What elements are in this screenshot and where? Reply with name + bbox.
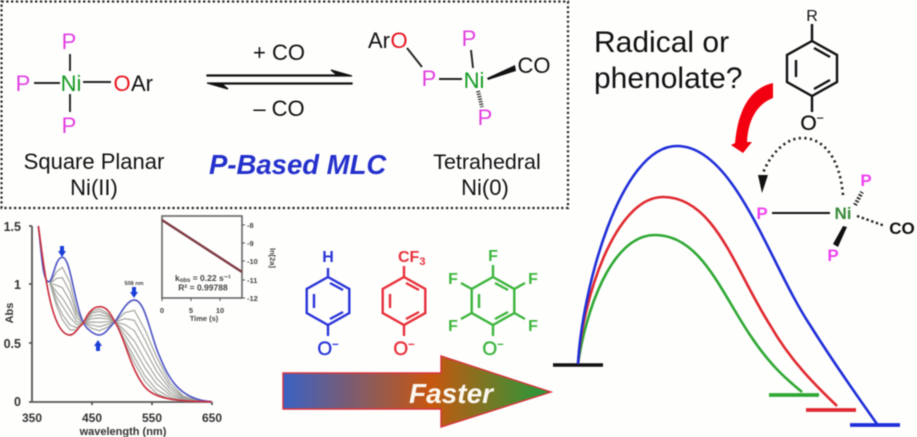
tetrahedral complex: Ni <box>464 68 484 93</box>
green phenolate: F <box>448 271 458 288</box>
label: P-Based MLC: P-Based MLC <box>209 149 387 180</box>
equilibrium arrows: + CO <box>253 40 305 65</box>
equilibrium arrows <box>207 40 352 121</box>
generic phenolate: − <box>817 111 824 125</box>
y tick labels: 1.5 <box>4 220 21 234</box>
blue phenolate: H <box>322 249 334 266</box>
generic phenolate: R <box>806 8 818 25</box>
heading: radical or phenolate <box>594 26 742 95</box>
y axis title: Abs <box>4 303 16 323</box>
chart: absorbance spectra <box>4 220 222 437</box>
label: tetrahedral: Tetrahedral <box>433 150 541 174</box>
blue phenolate <box>307 249 349 360</box>
inset chart: kinetics: 5 <box>189 306 193 315</box>
inset chart: kinetics <box>160 216 277 323</box>
nickel intermediate with dotted attack arrow: P <box>827 246 839 265</box>
label: Ni(0): Ni(0) <box>461 175 509 200</box>
square planar complex: Ar <box>131 71 153 96</box>
inset chart: kinetics: 0 <box>160 306 164 315</box>
heading: radical or phenolate: Radical or <box>594 26 729 59</box>
y tick labels: 1 <box>14 278 21 292</box>
inset chart: kinetics: -11 <box>247 276 257 285</box>
green phenolate: F <box>528 318 538 335</box>
red phenolate: CF <box>398 249 419 266</box>
nickel intermediate with dotted attack arrow: P <box>860 171 872 190</box>
tetrahedral complex <box>368 26 550 130</box>
inset chart: kinetics: Time (s) <box>190 314 219 323</box>
spectra curves <box>38 226 212 402</box>
x tick labels: 350 <box>22 411 42 425</box>
green phenolate <box>448 248 538 360</box>
tetrahedral complex: P <box>478 105 492 130</box>
axes <box>29 226 212 405</box>
blue phenolate: − <box>332 339 339 351</box>
blue change arrows <box>58 246 138 351</box>
inset chart: kinetics: = 0.22 s⁻¹ <box>190 273 231 283</box>
generic phenolate: O <box>800 112 817 135</box>
square planar complex: O <box>113 71 131 96</box>
inset chart: kinetics: -9 <box>247 239 254 248</box>
inset chart: kinetics: -12 <box>247 294 258 303</box>
peak label: 508 nm <box>125 281 144 287</box>
equilibrium arrows: – CO <box>253 96 305 121</box>
x tick labels: 650 <box>202 411 222 425</box>
red phenolate: 3 <box>419 256 425 268</box>
inset chart: kinetics: -8 <box>247 221 254 230</box>
inset chart: kinetics: -10 <box>247 257 258 266</box>
nickel intermediate with dotted attack arrow: Ni <box>834 204 852 223</box>
generic phenolate <box>787 8 837 135</box>
label: Ni(II): Ni(II) <box>70 175 118 200</box>
green phenolate: F <box>448 318 458 335</box>
square planar complex <box>16 29 153 138</box>
x tick labels: 550 <box>142 411 162 425</box>
green phenolate: F <box>488 248 498 265</box>
red curved arrow <box>731 83 773 153</box>
blue phenolate: O <box>317 339 332 360</box>
red phenolate: O <box>393 339 408 360</box>
inset chart: kinetics: R² = 0.99788 <box>178 282 228 292</box>
nickel intermediate with dotted attack arrow: P <box>756 204 768 223</box>
y tick labels <box>4 220 21 409</box>
reaction coordinate curves <box>553 146 900 425</box>
inset chart: kinetics: k <box>175 273 180 283</box>
label: square planar: Square Planar <box>24 149 164 174</box>
nickel intermediate with dotted attack arrow: CO <box>889 219 915 238</box>
x tick labels: 450 <box>82 411 102 425</box>
square planar complex: P <box>62 29 76 54</box>
square planar complex: P <box>62 113 76 138</box>
red phenolate: − <box>408 339 415 351</box>
red phenolate <box>383 249 425 360</box>
tetrahedral complex: Ar <box>368 28 390 53</box>
square planar complex: P <box>16 71 30 96</box>
green phenolate: F <box>528 271 538 288</box>
tetrahedral complex: CO <box>518 53 550 78</box>
inset chart: kinetics: ln[2a] <box>268 248 277 268</box>
square planar complex: Ni <box>61 71 81 96</box>
tetrahedral complex: P <box>462 26 476 51</box>
green phenolate: − <box>497 339 504 351</box>
gradient arrow: faster: Faster <box>409 378 495 409</box>
green phenolate: O <box>482 339 497 360</box>
inset chart: kinetics: 10 <box>216 306 224 315</box>
y tick labels: 0.5 <box>4 337 21 351</box>
gradient arrow: faster <box>283 356 551 427</box>
tetrahedral complex: P <box>422 66 436 91</box>
x tick labels <box>22 411 222 425</box>
panel: mechanism box <box>2 2 568 208</box>
nickel intermediate with dotted attack arrow <box>756 138 915 265</box>
y tick labels: 0 <box>14 395 21 409</box>
tetrahedral complex: O <box>390 28 408 53</box>
heading: radical or phenolate: phenolate? <box>594 62 742 95</box>
inset chart: kinetics: obs <box>180 278 191 284</box>
